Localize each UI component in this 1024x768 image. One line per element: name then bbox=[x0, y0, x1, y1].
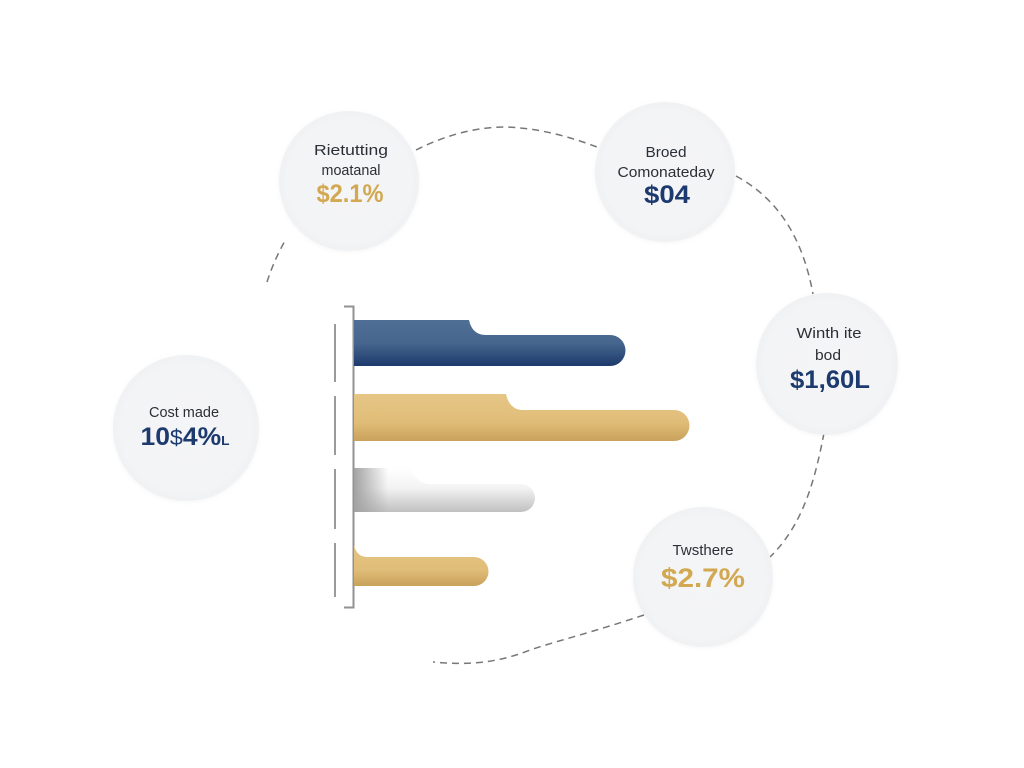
node: top right: $04 bbox=[644, 181, 690, 209]
node: left: Cost made bbox=[149, 405, 219, 421]
node: bottom right: Twsthere bbox=[672, 543, 734, 559]
axis tick dashes bbox=[334, 324, 336, 597]
dashed connector: upper right arc bbox=[736, 176, 813, 294]
dashed connector: lower right arc bbox=[770, 433, 824, 557]
dashed connector: bottom arc bbox=[433, 615, 644, 663]
bar 1: navy bbox=[354, 320, 626, 366]
node: top left bbox=[279, 111, 419, 251]
node: left bbox=[113, 355, 259, 501]
bar chart bbox=[335, 306, 690, 608]
node: top right: Comonateday bbox=[618, 165, 715, 181]
node: right: bod bbox=[815, 348, 841, 364]
node: top right: Broed bbox=[646, 145, 686, 161]
node: top left: moatanal bbox=[322, 163, 380, 179]
axis bracket bbox=[344, 306, 354, 608]
bar 3: white and grey bbox=[354, 468, 535, 512]
node: right: Winth ite bbox=[796, 326, 862, 342]
bar 4: gold bbox=[354, 545, 488, 586]
dashed connector: top arc bbox=[416, 127, 597, 150]
node: top left: Rietutting bbox=[314, 143, 388, 159]
bar 2: gold bbox=[354, 394, 690, 441]
node: top left: $2.1% bbox=[316, 180, 384, 208]
node: right: $1,60L bbox=[790, 366, 870, 394]
node: right bbox=[756, 293, 898, 435]
dashed connector: left arc bbox=[267, 239, 286, 282]
node: bottom right: $2.7% bbox=[661, 563, 745, 593]
node: left: 10$4%L bbox=[140, 423, 230, 451]
node: bottom right bbox=[633, 507, 773, 647]
node: top right bbox=[595, 102, 735, 242]
